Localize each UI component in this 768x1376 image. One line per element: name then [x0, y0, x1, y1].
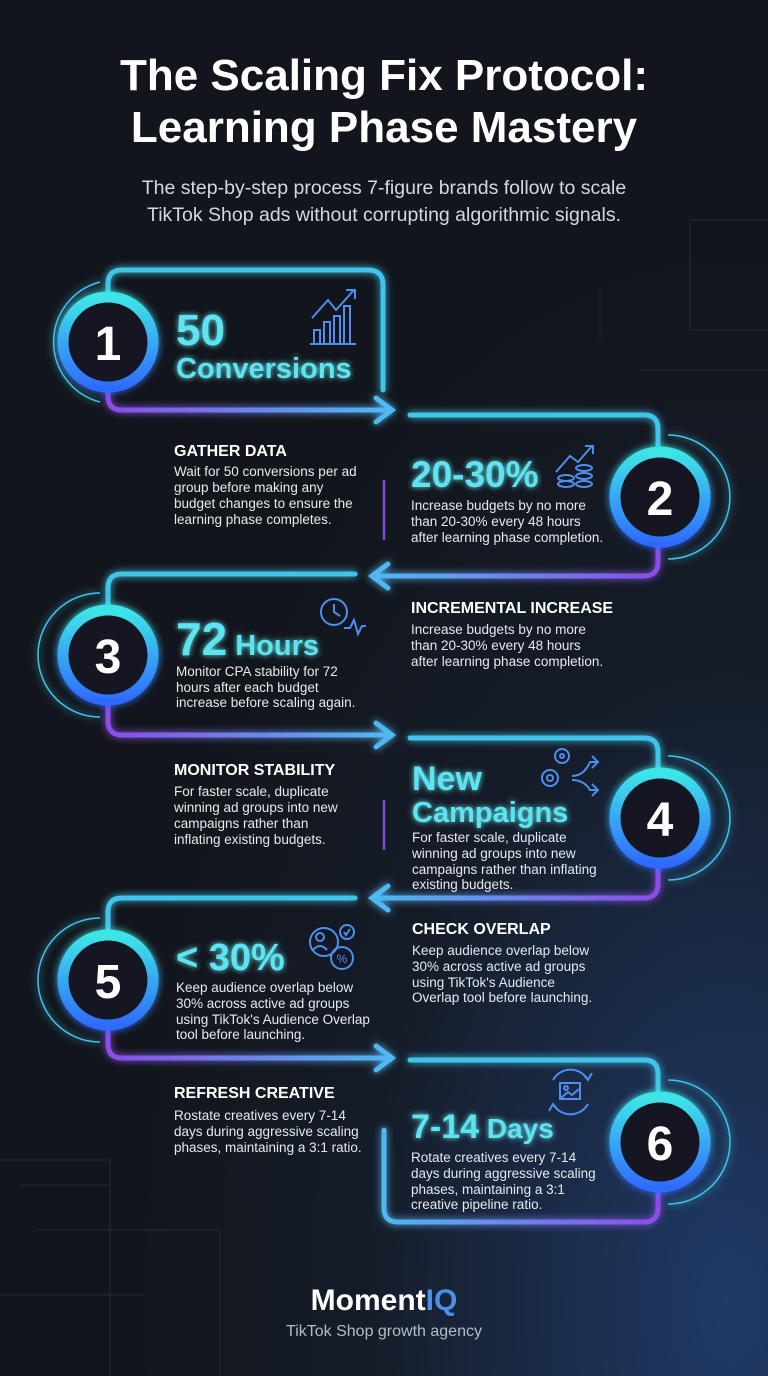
step 5 text: Keep audience overlap below — [176, 980, 353, 995]
step 1 stat: 50 — [176, 306, 225, 355]
refresh creative text: phases, maintaining a 3:1 ratio. — [174, 1140, 362, 1155]
step 3 stat: 72 Hours — [176, 613, 319, 665]
incremental increase text: Increase budgets by no more — [411, 622, 586, 637]
check overlap text: using TikTok's Audience — [412, 975, 555, 990]
icon: image refresh — [549, 1070, 592, 1114]
refresh creative text: Rostate creatives every 7-14 — [174, 1108, 346, 1123]
step 1 stat: Conversions — [176, 353, 352, 385]
title: Learning Phase Mastery — [131, 103, 638, 152]
step 2 text: after learning phase completion. — [411, 530, 603, 545]
step 5 stat: < 30% — [176, 937, 285, 979]
circle 6: 6 — [647, 1118, 673, 1171]
monitor stability text: winning ad groups into new — [173, 800, 338, 815]
icon: audience: % — [337, 952, 348, 966]
step 1 text: Wait for 50 conversions per ad — [174, 464, 357, 479]
icon: clock — [321, 599, 366, 634]
circle 3: 3 — [95, 631, 121, 684]
step 6 text: phases, maintaining a 3:1 — [411, 1182, 565, 1197]
step 6 stat: 7-14 Days — [411, 1108, 554, 1146]
step 1 text: GATHER DATA — [174, 443, 287, 460]
footer logo: TikTok Shop growth agency — [286, 1323, 482, 1340]
step 3 text: Monitor CPA stability for 72 — [176, 664, 338, 679]
step 3 text — [176, 664, 355, 710]
circle 4 — [615, 756, 730, 880]
step 1 text: group before making any — [174, 480, 324, 495]
step 4 text — [411, 830, 597, 892]
connector paths — [108, 270, 658, 1222]
step 4 stat — [412, 760, 568, 829]
monitor stability text: For faster scale, duplicate — [174, 784, 329, 799]
footer logo: MomentIQ — [311, 1284, 457, 1317]
step 1 stat — [176, 306, 352, 385]
step 2 stat: 20-30% — [411, 454, 539, 495]
title — [120, 51, 648, 152]
step 1 text: learning phase completes. — [174, 512, 332, 527]
step 4 stat: New — [412, 760, 482, 798]
subtitle: The step-by-step process 7-figure brands follow to scale — [142, 177, 626, 199]
step 2 text — [411, 498, 603, 545]
step 6 text — [411, 1150, 596, 1212]
step 6 text: creative pipeline ratio. — [411, 1197, 542, 1212]
check overlap text: Keep audience overlap below — [412, 943, 589, 958]
icon: audience — [310, 925, 354, 969]
icon: coins — [556, 446, 593, 487]
step 4 text: For faster scale, duplicate — [412, 830, 567, 845]
step 5 text: using TikTok's Audience Overlap — [176, 1012, 370, 1027]
check overlap text: CHECK OVERLAP — [412, 921, 551, 938]
circle 2 — [615, 435, 730, 559]
step 3 text: increase before scaling again. — [176, 695, 355, 710]
circle 5: 5 — [95, 956, 121, 1009]
monitor stability text: campaigns rather than — [174, 816, 308, 831]
step 1 text: budget changes to ensure the — [174, 496, 353, 511]
circle 4: 4 — [647, 794, 674, 847]
step 4 text: campaigns rather than inflating — [412, 862, 597, 877]
subtitle: TikTok Shop ads without corrupting algorithmic signals. — [147, 204, 621, 226]
check overlap text — [412, 921, 592, 1005]
subtitle — [142, 177, 626, 226]
incremental increase text: after learning phase completion. — [411, 654, 603, 669]
circle 1: 1 — [95, 318, 121, 371]
step 1 text — [174, 443, 357, 527]
step 4 text: existing budgets. — [412, 877, 513, 892]
step 5 text: tool before launching. — [176, 1027, 305, 1042]
refresh creative text: days during aggressive scaling — [174, 1124, 359, 1139]
step 6 text: Rotate creatives every 7-14 — [411, 1150, 577, 1165]
circle 5 — [38, 918, 153, 1042]
step 5 text — [176, 980, 370, 1042]
step 2 text: Increase budgets by no more — [411, 498, 586, 513]
refresh creative text — [174, 1085, 362, 1155]
step 5 text: 30% across active ad groups — [176, 996, 350, 1011]
monitor stability text: MONITOR STABILITY — [174, 762, 336, 779]
monitor stability text: inflating existing budgets. — [174, 832, 326, 847]
incremental increase text: INCREMENTAL INCREASE — [411, 600, 613, 617]
incremental increase text: than 20-30% every 48 hours — [411, 638, 581, 653]
check overlap text: 30% across active ad groups — [412, 959, 586, 974]
icon: gears — [542, 749, 598, 796]
icon: chart — [310, 290, 356, 344]
footer logo — [286, 1284, 482, 1340]
title: The Scaling Fix Protocol: — [120, 51, 648, 100]
refresh creative text: REFRESH CREATIVE — [174, 1085, 335, 1102]
circle 1 — [54, 282, 153, 402]
step 2 text: than 20-30% every 48 hours — [411, 514, 581, 529]
circle 6 — [615, 1080, 730, 1204]
step 4 stat: Campaigns — [412, 797, 568, 829]
circle 3 — [38, 593, 153, 717]
step 6 text: days during aggressive scaling — [411, 1166, 596, 1181]
check overlap text: Overlap tool before launching. — [412, 990, 592, 1005]
step 3 text: hours after each budget — [176, 680, 319, 695]
monitor stability text — [173, 762, 338, 847]
circle 2: 2 — [647, 473, 673, 526]
incremental increase text — [411, 600, 613, 669]
step 4 text: winning ad groups into new — [411, 846, 576, 861]
